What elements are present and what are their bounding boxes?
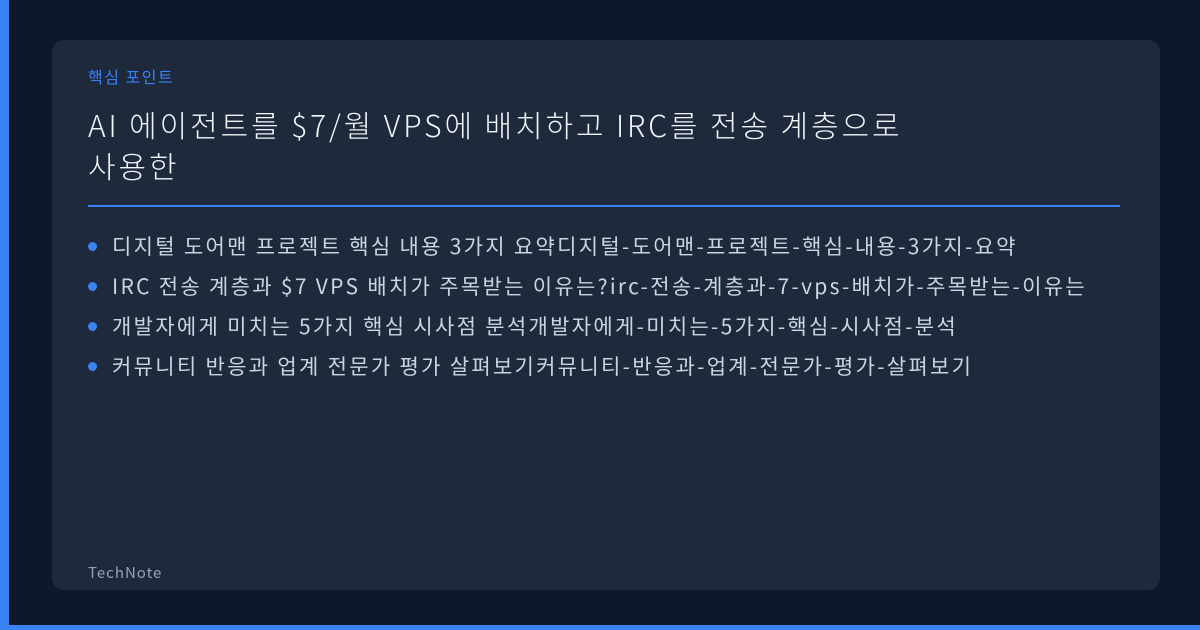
bullet 4: 커뮤니티 반응과 업계 전문가 평가 살펴보기커뮤니티-반응과-업계-전문가-평가-살펴보기 bbox=[112, 351, 973, 381]
title: AI 에이전트를 $7/월 VPS에 배치하고 IRC를 전송 계층으로 bbox=[88, 102, 902, 146]
bullet list bbox=[88, 231, 1087, 381]
title: 사용한 bbox=[88, 143, 180, 187]
bullet 1: 디지털 도어맨 프로젝트 핵심 내용 3가지 요약디지털-도어맨-프로젝트-핵심-내용-3가지-요약 bbox=[112, 231, 1018, 261]
bullet 3: 개발자에게 미치는 5가지 핵심 시사점 분석개발자에게-미치는-5가지-핵심-시사점-분석 bbox=[112, 311, 958, 341]
footer brand: TechNote bbox=[88, 562, 162, 583]
kicker: 핵심 포인트 bbox=[88, 64, 174, 88]
title bbox=[88, 102, 902, 187]
bullet 2: IRC 전송 계층과 $7 VPS 배치가 주목받는 이유는?irc-전송-계층과-7-vps-배치가-주목받는-이유는 bbox=[112, 271, 1087, 301]
